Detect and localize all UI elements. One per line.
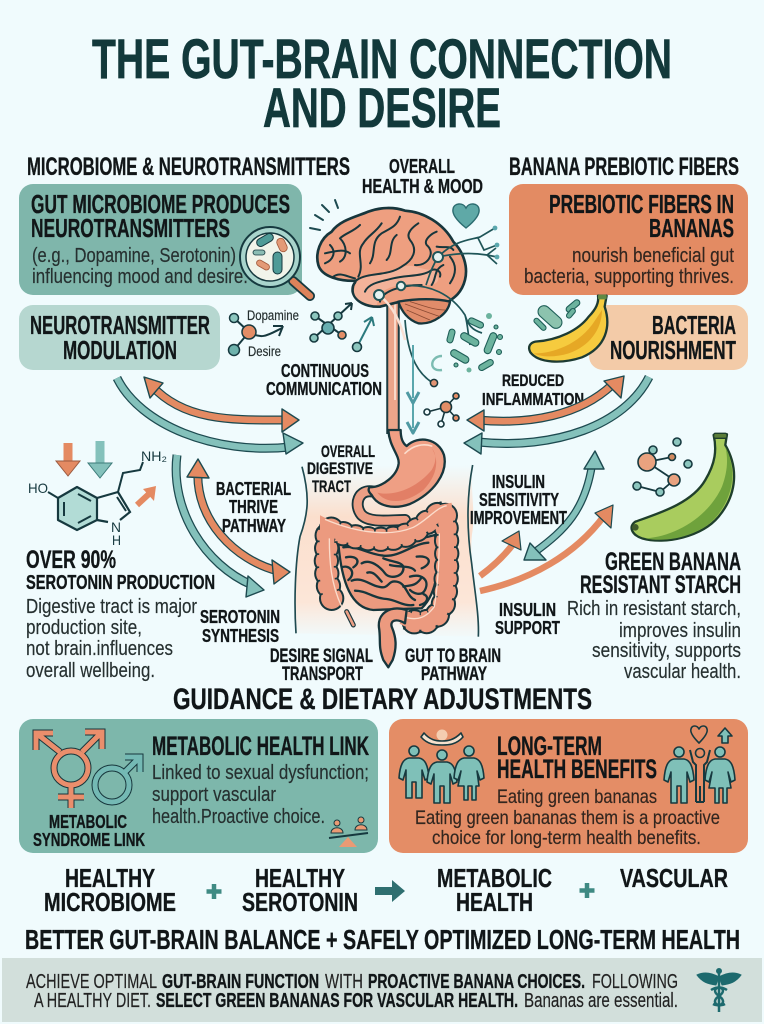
panel: neurotransmitter modulation: NEUROTRANSMITTER [30, 312, 210, 340]
text block: over 90 percent serotonin production: overall wellbeing. [26, 659, 155, 682]
text: metabolic health link copy [152, 731, 369, 828]
text: long-term health benefits copy: Eating green bananas [497, 786, 657, 808]
text: long-term health benefits copy: choice for long-term health benefits. [432, 827, 701, 849]
label: desire signal transport: TRANSPORT [282, 664, 363, 685]
arrow: top left teal [117, 378, 303, 454]
icon: starch molecule [633, 438, 692, 496]
label: insulin sensitivity improvement: INSULIN [492, 472, 545, 492]
text: long-term health benefits copy: LONG-TERM [497, 731, 602, 761]
sub-element: stomach [369, 430, 445, 507]
illustration: spinal cord [393, 300, 395, 434]
text: metabolic health link copy: health.Proactive choice. [152, 806, 325, 828]
equation: healthy microbiome: MICROBIOME [44, 887, 176, 917]
text block: over 90 percent serotonin production: not brain.influences [26, 637, 173, 660]
text: footer message: ACHIEVE OPTIMAL [26, 971, 157, 993]
text: metabolic health link copy: METABOLIC HEALTH LINK [152, 731, 369, 761]
label: gut to brain pathway [405, 646, 501, 685]
arrow: right insulin teal [524, 451, 604, 560]
label: metabolic syndrome link [33, 811, 145, 850]
text: metabolic health link copy: Linked to sexual dysfunction; [152, 762, 369, 784]
icon: bacteria cluster [432, 299, 581, 372]
icon: serotonin molecule with arrows: H [112, 532, 121, 548]
panel: footer band [2, 958, 762, 1022]
equation: healthy microbiome [44, 863, 176, 917]
arrow: top left orange [144, 377, 299, 432]
equation: healthy serotonin: HEALTHY [255, 863, 345, 893]
text block: over 90 percent serotonin production: SEROTONIN PRODUCTION [26, 571, 215, 594]
illustration: brain [317, 208, 466, 323]
equation: metabolic health: METABOLIC [437, 863, 552, 893]
panel: bacteria nourishment [589, 305, 748, 370]
label: desire signal transport [270, 646, 373, 685]
panel: long-term health benefits [389, 719, 748, 853]
title: AND DESIRE [263, 76, 501, 139]
panel: gut microbiome produces neurotransmitters: influencing mood and desire. [32, 265, 248, 288]
icon: serotonin molecule with arrows: N [111, 519, 121, 535]
label: insulin sensitivity improvement: IMPROVEMENT [470, 508, 567, 528]
sub-element: large intestine [325, 506, 447, 622]
icon: family right [664, 726, 735, 803]
icon: plus [580, 883, 594, 898]
label: gut to brain pathway: PATHWAY [421, 664, 487, 685]
label: reduced inflammation: INFLAMMATION [482, 389, 584, 409]
icon: gender symbols [36, 732, 140, 808]
text block: green banana resistant starch: improves insulin [619, 619, 741, 642]
heading: overall health and mood: OVERALL [389, 155, 455, 178]
equation: metabolic health: HEALTH [456, 887, 533, 917]
text: metabolic health link copy: support vascular [152, 784, 276, 806]
arrow: top right orange [467, 376, 624, 431]
label: serotonin synthesis [200, 606, 280, 646]
icon: dopamine desire molecule: Desire [248, 344, 281, 359]
icon: radiating lines and heart [310, 200, 479, 230]
label: continuous communication: COMMUNICATION [266, 378, 382, 399]
icon: serotonin molecule with arrows: NH₂ [141, 448, 167, 464]
icon: dopamine desire molecule [228, 308, 299, 359]
text: footer message: WITH [325, 971, 363, 993]
label: insulin support: INSULIN [499, 599, 556, 620]
panel: prebiotic fibers in bananas [509, 184, 748, 295]
text block: over 90 percent serotonin production: Digestive tract is major [26, 595, 197, 618]
label: metabolic syndrome link: METABOLIC [49, 811, 127, 832]
icon: family left [399, 730, 484, 803]
text: long-term health benefits copy: HEALTH BENEFITS [497, 754, 657, 784]
label: insulin support: SUPPORT [495, 617, 561, 638]
text: footer message [26, 971, 678, 1012]
icon: dopamine desire molecule: Dopamine [247, 308, 299, 323]
panel: gut microbiome produces neurotransmitters: (e.g., Dopamine, Serotonin) [32, 244, 236, 267]
heading: microbiome and neurotransmitters: MICROBIOME & NEUROTRANSMITTERS [27, 153, 350, 181]
text: footer message: GUT-BRAIN FUNCTION [162, 971, 319, 993]
title [92, 27, 672, 139]
label: overall digestive tract: DIGESTIVE [307, 459, 373, 478]
label: reduced inflammation: REDUCED [502, 371, 564, 390]
illustration: abdomen, stomach and intestines [295, 430, 480, 667]
text: footer message: SELECT GREEN BANANAS FOR VASCULAR HEALTH. [156, 990, 518, 1012]
sub-element: appendix and rectum [347, 609, 407, 667]
text: footer message: FOLLOWING [592, 971, 678, 993]
panel: neurotransmitter modulation: MODULATION [63, 337, 177, 365]
label: gut to brain pathway: GUT TO BRAIN [405, 646, 501, 667]
label: insulin sensitivity improvement: SENSITIVITY [479, 490, 559, 510]
label: continuous communication [266, 360, 382, 399]
icon: balance scale [329, 817, 368, 847]
label: bacterial thrive pathway: BACTERIAL [216, 478, 291, 499]
label: overall digestive tract: TRACT [312, 477, 351, 496]
arrow: left serotonin teal [176, 455, 264, 597]
arrow: left bacterial thrive orange [187, 459, 290, 584]
heading: overall health and mood [362, 155, 483, 198]
label: insulin support [495, 599, 561, 638]
text block: over 90 percent serotonin production: OVER 90% [26, 546, 116, 574]
icon: green banana [632, 433, 734, 541]
equation: healthy microbiome: HEALTHY [65, 863, 155, 893]
text: footer message: PROACTIVE BANANA CHOICES. [368, 971, 585, 993]
icon: yellow banana [529, 295, 607, 362]
panel: gut microbiome produces neurotransmitters [19, 184, 302, 295]
label: desire signal transport: DESIRE SIGNAL [270, 646, 373, 667]
icon: molecule network near brain [310, 303, 374, 352]
panel: gut microbiome produces neurotransmitters: NEUROTRANSMITTERS [31, 215, 230, 243]
equation: healthy serotonin: SEROTONIN [242, 887, 358, 917]
label: serotonin synthesis: SEROTONIN [200, 606, 280, 627]
label: overall digestive tract [307, 442, 375, 496]
icon: plus [206, 884, 222, 899]
label: continuous communication: CONTINUOUS [281, 360, 369, 381]
text block: over 90 percent serotonin production: production site, [26, 616, 142, 639]
text: footer message: A HEALTHY DIET. [34, 990, 151, 1012]
panel: gut microbiome produces neurotransmitters: GUT MICROBIOME PRODUCES [31, 191, 290, 219]
arrow: equation arrow [375, 880, 405, 902]
icon: caduceus [697, 968, 741, 1012]
label: bacterial thrive pathway: PATHWAY [222, 515, 286, 536]
text block: green banana resistant starch [567, 548, 741, 683]
equation: metabolic health [437, 863, 552, 917]
text block: over 90 percent serotonin production [26, 546, 215, 682]
label: bacterial thrive pathway: THRIVE [229, 496, 278, 517]
label: serotonin synthesis: SYNTHESIS [202, 625, 279, 646]
text block: green banana resistant starch: vascular health. [624, 660, 741, 683]
label: bacterial thrive pathway [216, 478, 291, 536]
label: insulin sensitivity improvement [470, 472, 567, 528]
icon: nerve branches [374, 226, 499, 433]
icon: magnifier with bacteria [240, 227, 310, 296]
arrow: top right teal [464, 377, 649, 454]
icon: molecule near spine [424, 393, 459, 427]
label: overall digestive tract: OVERALL [321, 442, 375, 461]
sub-element: small intestine [338, 535, 437, 610]
arrow: right short orange [480, 531, 521, 576]
heading: guidance and dietary adjustments: GUIDANCE & DIETARY ADJUSTMENTS [173, 683, 592, 716]
icon: serotonin molecule with arrows [28, 441, 167, 548]
equation: healthy serotonin [242, 863, 358, 917]
equation: vascular: VASCULAR [620, 863, 728, 893]
panel: neurotransmitter modulation [19, 305, 220, 370]
panel: metabolic health link [19, 719, 378, 853]
arrow: right long orange [480, 505, 613, 591]
text: long-term health benefits copy [415, 731, 720, 849]
label: metabolic syndrome link: SYNDROME LINK [33, 829, 145, 850]
panel: prebiotic fibers in bananas: nourish beneficial gut [572, 244, 734, 267]
icon: serotonin molecule with arrows: HO [28, 480, 48, 496]
sub-element: duodenum [358, 491, 405, 521]
heading: overall health and mood: HEALTH & MOOD [362, 175, 483, 198]
text: footer message: Bananas are essential. [524, 990, 678, 1012]
label: reduced inflammation [482, 371, 584, 409]
